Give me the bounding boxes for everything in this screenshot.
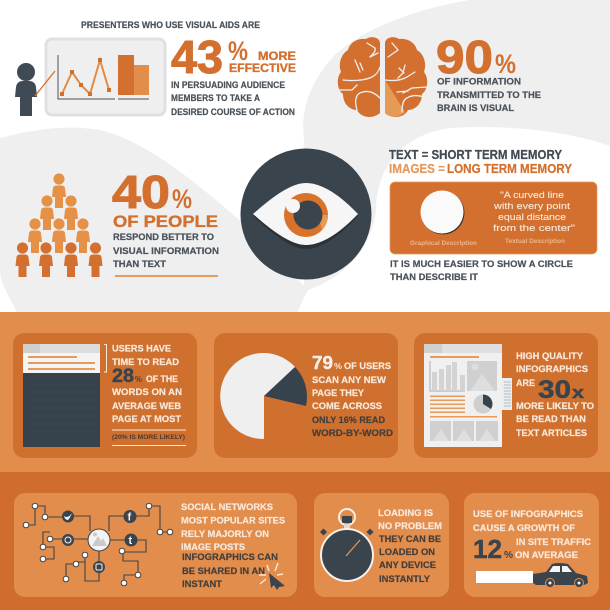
text: persuading audience: MEMBERS TO TAKE A (171, 93, 260, 104)
panel: 28 percent of words: 28 (112, 366, 134, 387)
panel: loading: THEY CAN BE (379, 534, 441, 545)
panel: 12 percent traffic: CAUSE A GROWTH OF (473, 523, 575, 534)
text: respond better (113, 232, 219, 277)
icon: web page (23, 344, 106, 447)
icon: brain (338, 37, 427, 117)
panel: 79 percent of users: PAGE THEY (312, 388, 365, 399)
panel: 30x infographics: x (572, 383, 585, 402)
text: information transmitted: TRANSMITTED TO THE (437, 90, 541, 101)
diagram: social network (23, 503, 173, 586)
stat: 90% (436, 31, 516, 83)
panel: 30x infographics: ARE (516, 378, 535, 389)
panel: 28 percent of words: USERS HAVE (112, 344, 171, 354)
panel: social networks: SOCIAL NETWORKS (181, 502, 273, 513)
panel: loading (314, 493, 449, 597)
text: easier to show a circle (390, 259, 573, 283)
panel: 12 percent traffic: ON AVERAGE (515, 550, 578, 561)
panel: social networks: BE SHARED IN AN (182, 566, 265, 577)
text: easier to show a circle: IT IS MUCH EASIER TO SHOW A CIRCLE (390, 259, 573, 270)
panel: 12 percent traffic: 12 (473, 534, 502, 564)
panel: social networks: IMAGE POSTS (181, 542, 245, 553)
panel: 28 percent of words: TIME TO READ (112, 357, 179, 368)
stat: 43% more effective: 43 (171, 31, 223, 83)
panel: 28 percent of words: AVERAGE WEB (112, 401, 181, 412)
stat: 43% more effective: EFFECTIVE (229, 61, 296, 75)
icon: infographic document (424, 344, 512, 447)
stat: 40% of people (112, 166, 218, 231)
text: persuading audience: IN PERSUADING AUDIENCE (171, 80, 285, 91)
panel: 79 percent of users: ONLY 16% READ (312, 415, 385, 426)
panel: circle description: "A curved line (500, 190, 564, 201)
icon: car with white trail (476, 563, 588, 588)
stat: 40% of people: 40 (112, 166, 170, 218)
icon: eye (240, 148, 372, 280)
icon: circle (420, 190, 464, 234)
stat: 90%: 90 (436, 31, 493, 83)
text: information transmitted: OF INFORMATION (437, 76, 521, 88)
stat: 90%: % (495, 49, 516, 79)
panel: 12 percent traffic: IN SITE TRAFFIC (516, 537, 591, 548)
panel: loading: NO PROBLEM (378, 521, 442, 532)
panel: loading: LOADED ON (379, 547, 435, 558)
panel: 28 percent of words: (20% IS MORE LIKELY) (112, 434, 185, 441)
panel: social networks: RELY MAJORLY ON (181, 529, 269, 540)
panel: circle description: with every point (493, 201, 570, 212)
panel: 79 percent of users: OF USERS (344, 361, 391, 372)
panel: loading: INSTANTLY (379, 574, 431, 585)
diagram: social network: f (128, 512, 132, 524)
panel: 28 percent of words (13, 333, 197, 458)
text: persuading audience: DESIRED COURSE OF ACTION (171, 107, 295, 118)
stat: 43% more effective: MORE (258, 49, 296, 63)
panel: 12 percent traffic: USE OF INFOGRAPHICS (473, 509, 583, 520)
panel: 79 percent of users: % (334, 362, 342, 371)
panel: 12 percent traffic (464, 493, 599, 597)
panel: 30x infographics (414, 333, 598, 458)
heading: presenters: PRESENTERS WHO USE VISUAL AIDS ARE (81, 20, 260, 31)
stat: 40% of people: OF PEOPLE (113, 213, 218, 231)
panel: 28 percent of words: WORDS ON AN (112, 387, 182, 398)
panel: social networks: INSTANT (182, 579, 222, 590)
panel: circle description: equal distance (498, 212, 566, 223)
panel: loading: LOADING IS (378, 508, 433, 519)
panel: 12 percent traffic: % (504, 550, 513, 561)
panel: 28 percent of words: % (135, 375, 142, 384)
panel: 30x infographics: BE READ THAN (516, 414, 586, 425)
panel: 30x infographics: INFOGRAPHICS (516, 364, 588, 375)
panel: circle description: from the center" (493, 223, 575, 234)
panel: 79 percent of users: WORD-BY-WORD (312, 428, 393, 439)
panel: social networks (14, 493, 297, 597)
text: respond better: THAN TEXT (113, 259, 166, 270)
panel: 79 percent of users (214, 333, 398, 458)
panel: 79 percent of users: 79 (312, 353, 333, 373)
panel: loading: ANY DEVICE (379, 560, 436, 571)
panel: 79 percent of users: SCAN ANY NEW (312, 375, 386, 386)
heading: memory: TEXT = SHORT TERM MEMORY (389, 148, 563, 162)
text: persuading audience (171, 80, 295, 118)
icon: stopwatch (320, 509, 374, 581)
panel: 28 percent of words: PAGE AT MOST (112, 414, 181, 425)
text: information transmitted (437, 76, 541, 114)
panel: 30x infographics: TEXT ARTICLES (516, 428, 587, 439)
heading: memory: LONG TERM MEMORY (447, 162, 573, 176)
text: information transmitted: BRAIN IS VISUAL (437, 103, 514, 114)
chart: pie (220, 353, 307, 439)
heading: memory: IMAGES = (389, 162, 445, 176)
text: respond better: VISUAL INFORMATION (113, 246, 219, 257)
panel: circle description: Graphical Description (410, 240, 477, 247)
icon: people pyramid (16, 173, 102, 277)
stat: 43% more effective (171, 31, 296, 83)
panel: 79 percent of users: COME ACROSS (312, 401, 382, 412)
panel: 30x infographics: HIGH QUALITY (516, 351, 584, 362)
text: easier to show a circle: THAN DESCRIBE IT (390, 272, 478, 283)
text: respond better: RESPOND BETTER TO (113, 232, 214, 243)
icon: presenter at chart board (15, 39, 165, 116)
stat: 43% more effective: % (228, 36, 248, 66)
panel: 28 percent of words: OF THE (146, 374, 178, 385)
panel: circle description: Textual Description (505, 238, 565, 245)
icon: cursor click (259, 563, 285, 590)
panel: 30x infographics: 30 (538, 376, 571, 404)
heading: memory (389, 148, 573, 176)
diagram: social network: t (128, 535, 132, 547)
panel: social networks: INFOGRAPHICS CAN (182, 552, 278, 563)
panel: 30x infographics: MORE LIKELY TO (516, 401, 594, 412)
panel: circle description (390, 182, 597, 254)
panel: social networks: MOST POPULAR SITES (181, 516, 285, 526)
stat: 40% of people: % (172, 184, 192, 214)
